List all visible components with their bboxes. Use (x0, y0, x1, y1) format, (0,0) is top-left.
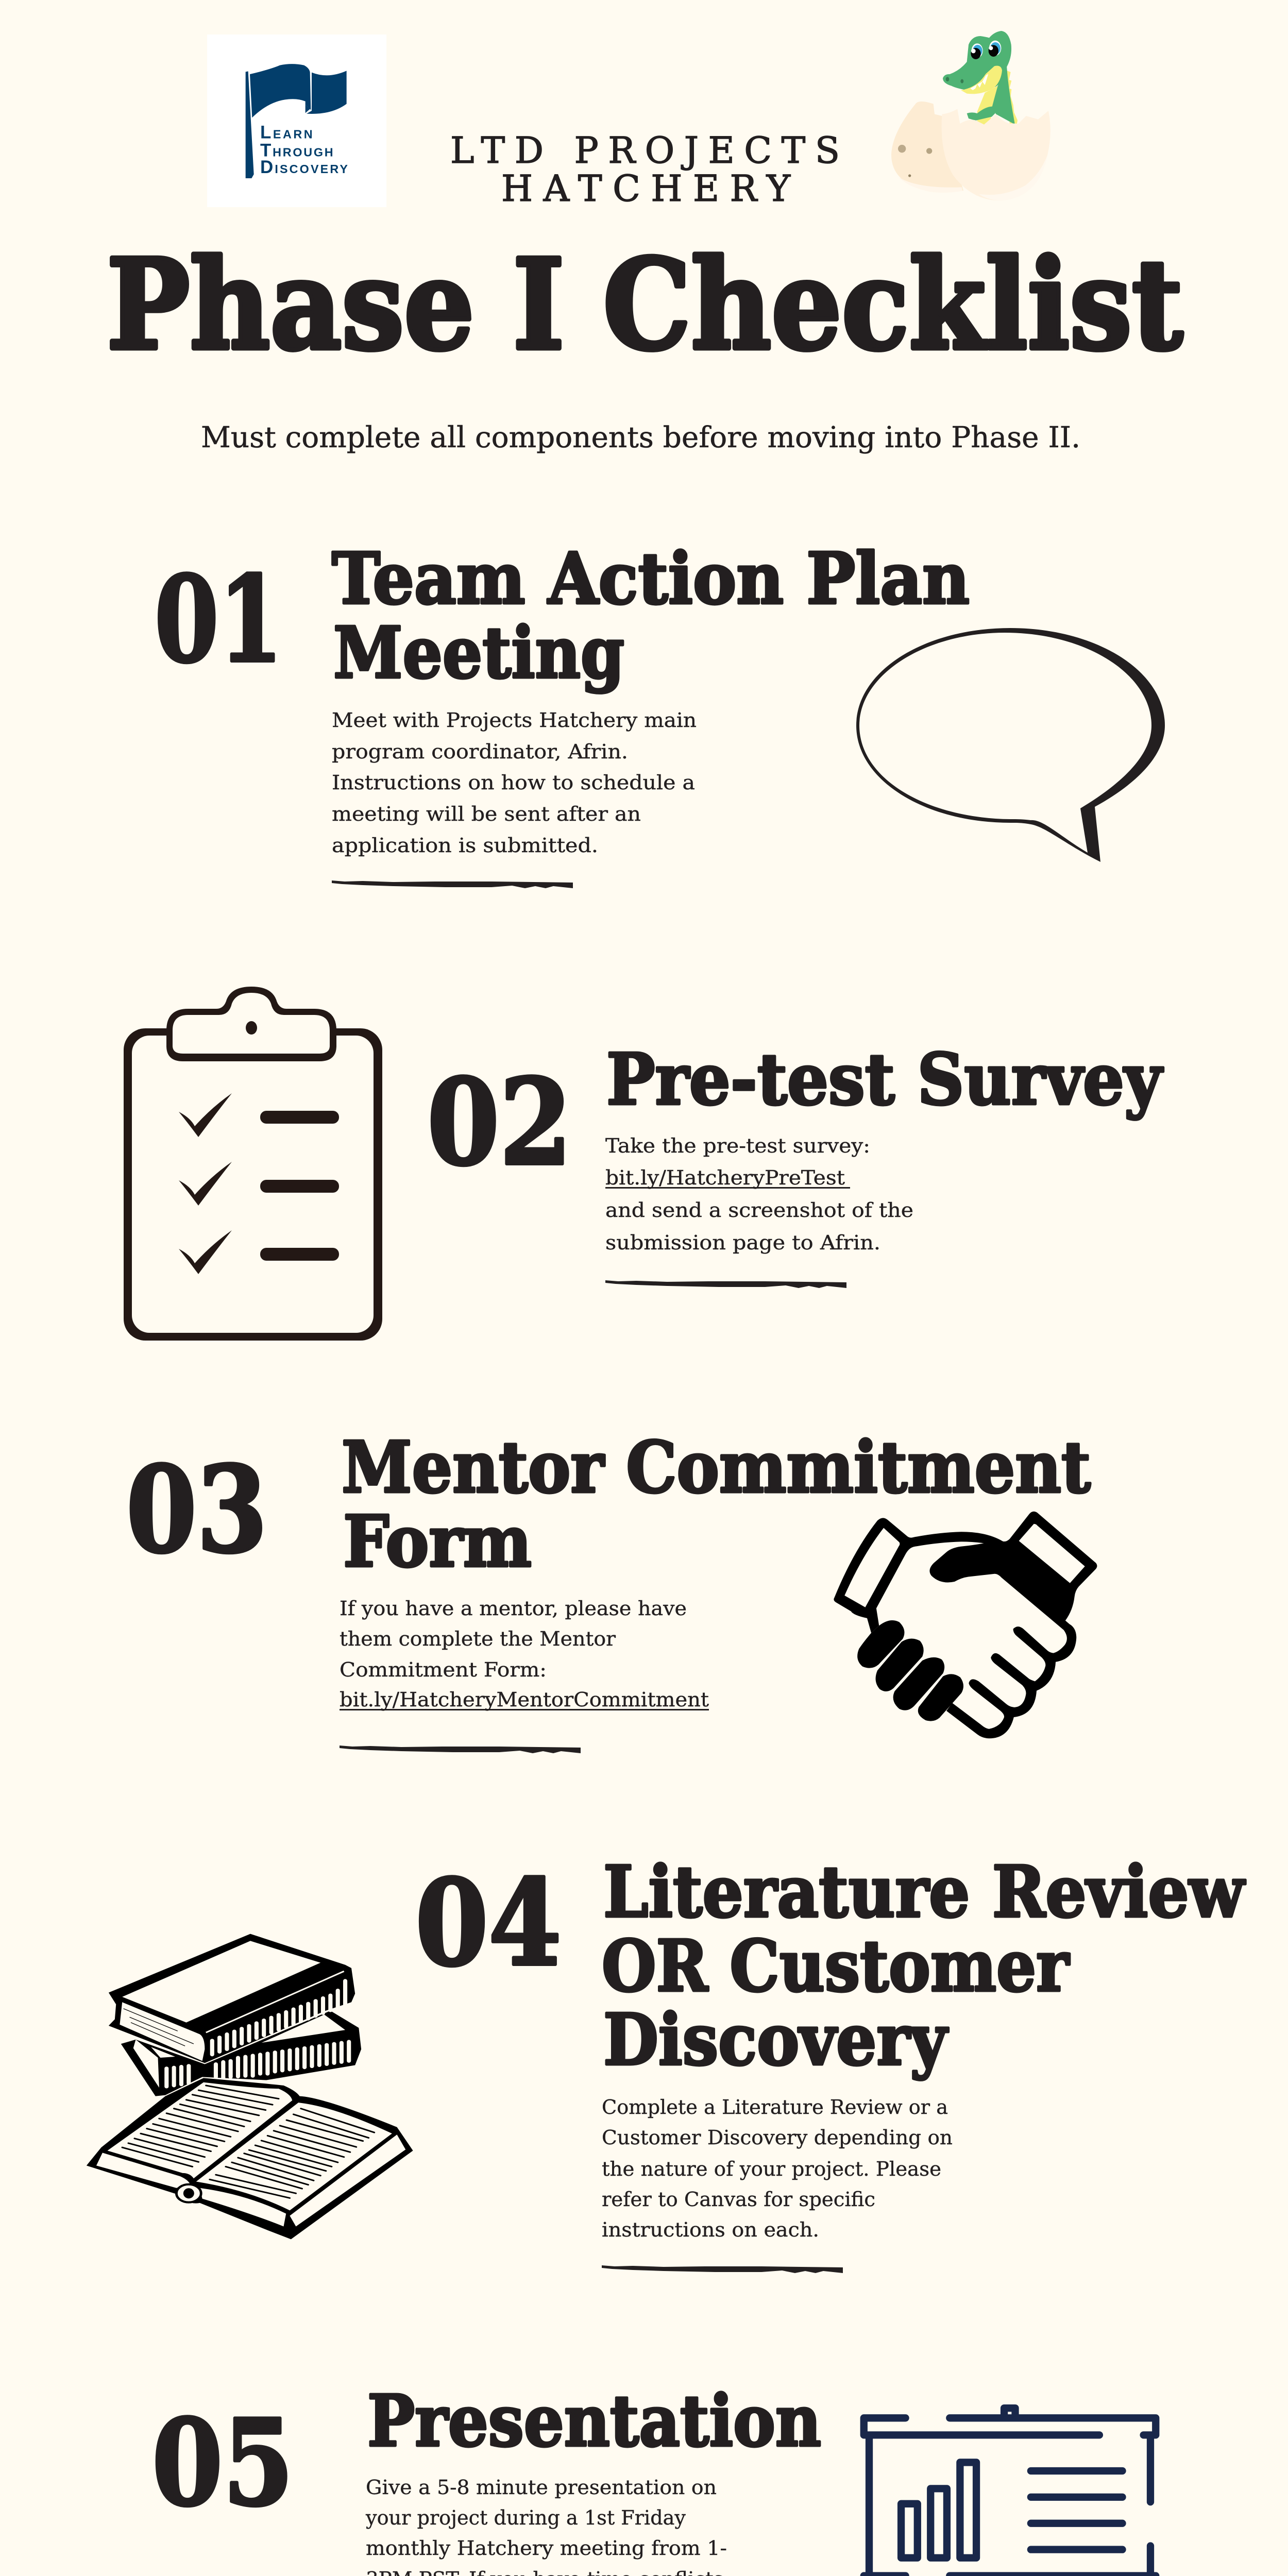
step 03 heading: Mentor Commitment (342, 1426, 1091, 1509)
icon: presentation board (864, 2408, 1156, 2576)
step 05 number: 05 (152, 2394, 294, 2533)
step 03 text: If you have a mentor, please have (340, 1597, 687, 1620)
step 04 heading: Discovery (603, 1998, 948, 2081)
step 03 heading: Form (343, 1500, 532, 1583)
step 05 text: your project during a 1st Friday (365, 2506, 686, 2529)
step 04 text: the nature of your project. Please (602, 2158, 941, 2180)
step 01 heading (332, 537, 970, 694)
logo: Learn Through Discovery (207, 35, 386, 207)
icon: baby alligator hatching from egg (891, 31, 1050, 200)
step 01 text: application is submitted. (332, 834, 598, 857)
step 05 text: Give a 5-8 minute presentation on (366, 2476, 717, 2499)
logo: Learn Through Discovery: LEARN (260, 122, 313, 142)
step 02 number: 02 (427, 1053, 572, 1192)
step 04 text: refer to Canvas for specific (602, 2188, 875, 2211)
step 02 heading: Pre-test Survey (606, 1038, 1163, 1121)
step 05 heading: Presentation (367, 2380, 821, 2463)
step 02 text: Take the pre-test survey: (605, 1134, 870, 1157)
icon: handshake (834, 1512, 1097, 1738)
step 03 brush divider (340, 1745, 581, 1753)
step 01 text: Instructions on how to schedule a (332, 771, 695, 794)
step 02 text: bit.ly/HatcheryPreTest (605, 1166, 845, 1189)
step 04 heading: OR Customer (602, 1925, 1070, 2008)
program name: LTD PROJECTS (450, 129, 840, 172)
step 01 brush divider (332, 880, 573, 888)
step 04 text: instructions on each. (602, 2218, 819, 2241)
step 03 number: 03 (126, 1440, 267, 1580)
step 03 text: them complete the Mentor (340, 1628, 616, 1650)
step 01 heading: Meeting (333, 612, 624, 694)
step 01 heading: Team Action Plan (332, 537, 970, 620)
step 04 text: Complete a Literature Review or a (602, 2096, 948, 2119)
logo: Learn Through Discovery: THROUGH (260, 140, 333, 160)
step 01 text: Meet with Projects Hatchery main (332, 709, 697, 732)
step 03 text: bit.ly/HatcheryMentorCommitment (340, 1688, 709, 1711)
step 04 heading: Literature Review (603, 1851, 1246, 1934)
step 04 brush divider (602, 2265, 843, 2273)
step 05 text: monthly Hatchery meeting from 1- (366, 2537, 727, 2560)
logo: Learn Through Discovery: DISCOVERY (260, 157, 348, 177)
icon: speech bubble (856, 628, 1165, 862)
step 02 text: and send a screenshot of the (605, 1199, 913, 1222)
step 02 brush divider (605, 1280, 846, 1288)
step 02 text (605, 1134, 913, 1254)
step 01 text (332, 709, 697, 857)
program name: HATCHERY (501, 167, 791, 210)
step 04 text (602, 2096, 953, 2241)
title: Phase I Checklist (107, 232, 1183, 378)
step 05 text (365, 2476, 730, 2576)
step 03 text (340, 1597, 709, 1711)
step 04 number: 04 (415, 1854, 562, 1993)
step 04 text: Customer Discovery depending on (602, 2126, 953, 2149)
icon: stack of books (87, 1934, 413, 2239)
step 01 text: meeting will be sent after an (332, 803, 641, 825)
step 01 number: 01 (155, 550, 283, 689)
program name (450, 129, 840, 210)
step 03 heading (342, 1426, 1091, 1583)
icon: clipboard checklist (124, 987, 382, 1341)
subtitle: Must complete all components before moving into Phase II. (201, 421, 1080, 454)
step 01 text: program coordinator, Afrin. (332, 740, 628, 763)
step 04 heading (602, 1851, 1246, 2081)
step 03 text: Commitment Form: (340, 1658, 547, 1681)
step 02 text: submission page to Afrin. (605, 1231, 880, 1254)
